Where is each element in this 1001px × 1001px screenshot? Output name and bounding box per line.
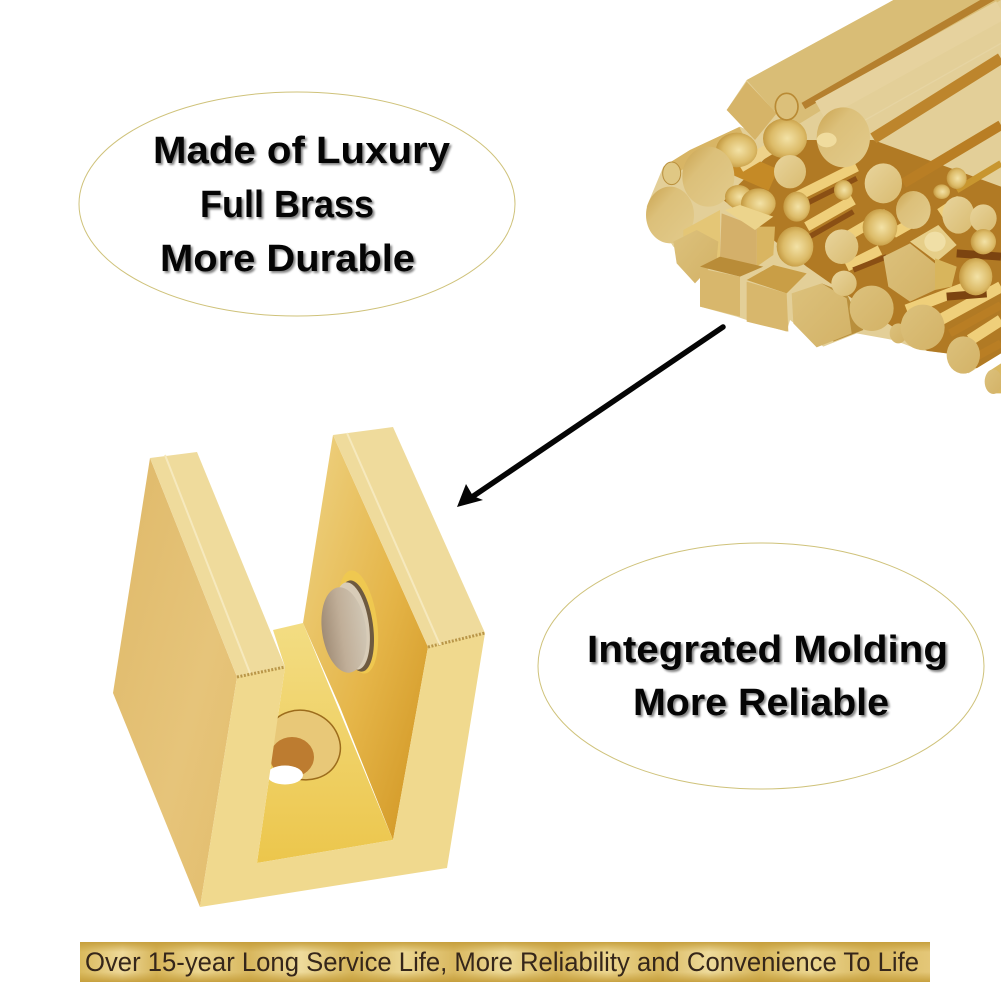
inner right wall [303, 435, 428, 840]
callout text line: Full Brass: Full Brass [200, 184, 374, 226]
left outer face [113, 458, 237, 907]
photo: bundle of brass rods [640, 0, 1001, 400]
rod ends lower [831, 271, 857, 296]
left top edge [150, 452, 285, 677]
rod ends upper [727, 82, 777, 140]
callout: Integrated Molding More Reliable [538, 543, 984, 789]
rod ends left [663, 162, 681, 185]
middle short rods [797, 167, 960, 267]
banner: service life [80, 942, 930, 982]
callout: Made of Luxury Full Brass More Durable [79, 92, 515, 316]
callout text line: Integrated Molding: Integrated Molding [587, 629, 948, 671]
banner text: Over 15-year Long Service Life, More Reliability and Convenience To Life [85, 947, 919, 977]
callout text line: More Durable: More Durable [160, 238, 415, 280]
bracket floor [257, 623, 393, 863]
front U face [200, 633, 485, 907]
hexagonal bar [910, 225, 957, 262]
screw and washer [316, 568, 384, 676]
countersunk hole [254, 698, 352, 792]
arrow: from brass rods to bracket [457, 327, 723, 507]
callout text line: Made of Luxury: Made of Luxury [153, 130, 450, 172]
left hexagon and square bars [683, 210, 720, 263]
top rods [747, 0, 1001, 123]
right top edge [333, 427, 485, 647]
photo: brass U-shaped glass clamp bracket [113, 427, 485, 907]
callout text line: More Reliable: More Reliable [633, 682, 889, 724]
